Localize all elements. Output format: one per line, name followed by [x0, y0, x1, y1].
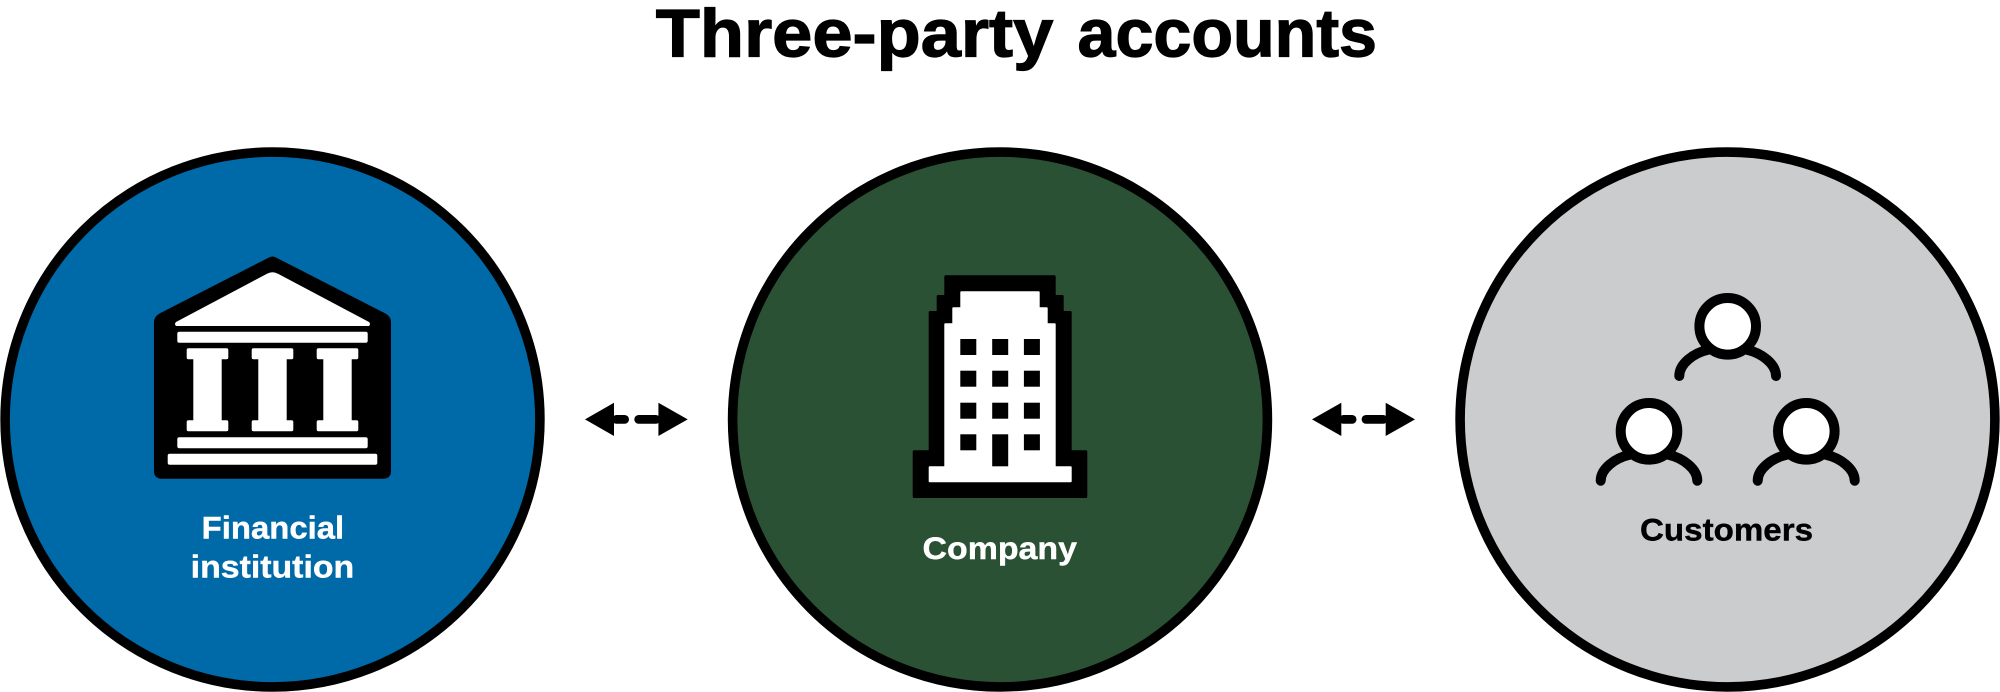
icon: person left	[1601, 403, 1697, 481]
icon: bank	[154, 256, 391, 479]
icon: person right	[1758, 403, 1855, 481]
icon: customers	[1601, 298, 1855, 481]
arrow: bank to company	[585, 403, 688, 436]
circle: financial institution	[5, 152, 540, 687]
label: company: Company	[922, 530, 1078, 566]
circle: customers	[1460, 152, 1995, 687]
label: financial institution: Financial	[202, 509, 344, 545]
label: financial institution: institution	[191, 548, 354, 584]
label: customers: Customers	[1640, 512, 1813, 548]
circle: company	[733, 152, 1267, 687]
icon: person top	[1679, 298, 1776, 376]
panel: company	[733, 152, 1267, 687]
icon: building	[914, 277, 1086, 496]
panel: financial institution	[5, 152, 540, 687]
panel: customers	[1460, 152, 1995, 687]
arrow: company to customers	[1312, 403, 1415, 436]
